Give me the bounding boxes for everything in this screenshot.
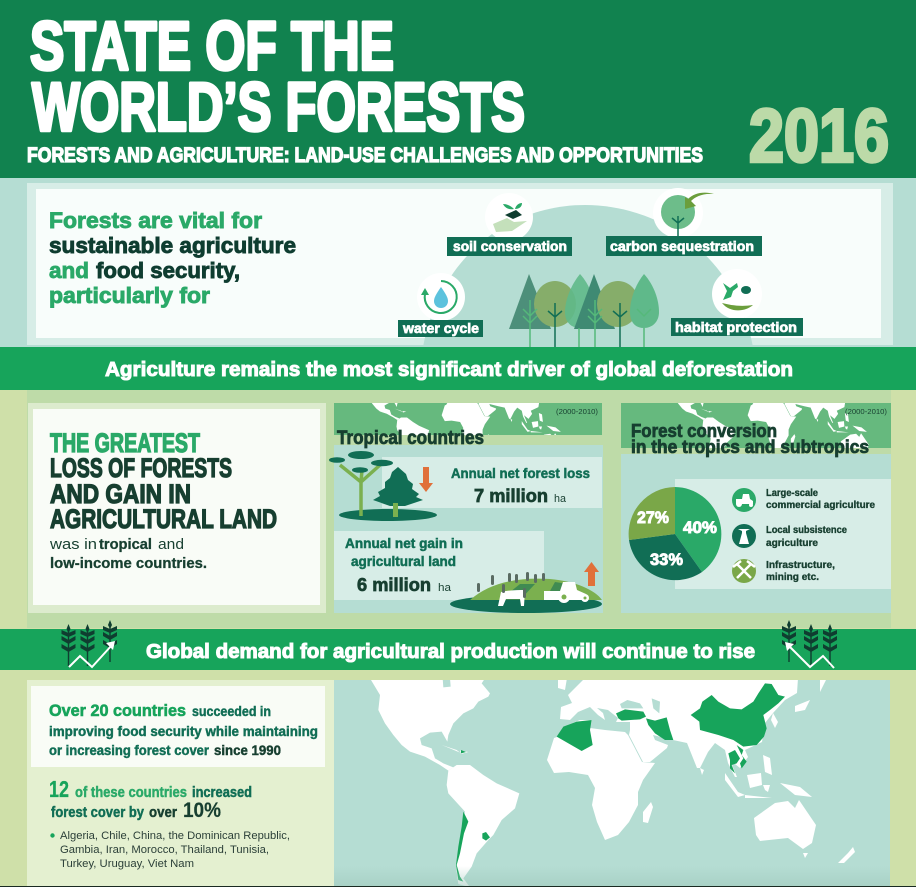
panel: forests are vital [0, 178, 916, 348]
middle section background [27, 390, 891, 628]
world map strip [621, 403, 891, 448]
title: WORLD’S FORESTS [32, 68, 525, 146]
pie chart: 40% [683, 518, 717, 537]
intro text: sustainable agriculture [49, 233, 296, 258]
panel: tropical countries [329, 403, 603, 613]
panel: the greatest loss: AND GAIN IN [50, 479, 191, 509]
highlighted countries: Eurasia and Africa [557, 683, 785, 773]
intro text: food security, [96, 258, 240, 283]
panel: the greatest loss: tropical [99, 537, 152, 553]
icon: water cycle [417, 273, 465, 321]
list of countries [50, 830, 290, 870]
year: 2016 [749, 94, 889, 178]
panel: the greatest loss: low-income countries. [50, 556, 207, 572]
legend: local subsistence agriculture: Local subsistence [766, 525, 847, 536]
stat: forest loss [451, 465, 590, 506]
banner: deforestation: Agriculture remains the most significant driver of global deforestation [105, 359, 793, 381]
panel: tropical countries: (2000-2010) [556, 409, 598, 416]
stat: agricultural gain [345, 535, 463, 595]
pie chart: 27% [637, 508, 669, 527]
panel: the greatest loss [28, 403, 326, 613]
title: STATE OF THE [30, 8, 394, 84]
text: over 20 countries: since 1990 [214, 742, 281, 758]
stat: agricultural gain: 6 million [357, 575, 431, 595]
intro text: particularly for [49, 283, 210, 308]
legend: large-scale agriculture: commercial agriculture [766, 500, 875, 511]
stat: agricultural gain: agricultural land [351, 553, 456, 569]
list of countries: Algeria, Chile, China, the Dominican Republic, [60, 830, 290, 842]
panel: the greatest loss: THE GREATEST [50, 428, 200, 458]
list of countries: Gambia, Iran, Morocco, Thailand, Tunisia, [60, 844, 269, 856]
label: habitat protection: habitat protection [675, 319, 797, 335]
text: 12 countries: over [149, 805, 177, 821]
icon: trees [329, 451, 437, 521]
subtitle: FORESTS AND AGRICULTURE: LAND-USE CHALLENGES AND OPPORTUNITIES [27, 144, 703, 167]
text: over 20 countries: Over 20 countries [49, 701, 186, 720]
arrow: forest loss [419, 467, 433, 492]
pie chart: 33% [650, 550, 683, 569]
arrow: land gain [584, 562, 599, 586]
title [30, 8, 525, 146]
icon: soil conservation [485, 193, 533, 241]
panel: forest conversion [621, 403, 891, 613]
legend: infrastructure and mining: mining etc. [766, 572, 819, 583]
panel: the greatest loss: and [158, 537, 184, 553]
banner: deforestation [0, 347, 916, 390]
heading: Forest conversion [631, 421, 777, 441]
legend: large-scale agriculture: Large-scale [766, 488, 818, 499]
intro text: and [49, 258, 89, 283]
intro text [49, 208, 296, 308]
label: soil conservation: soil conservation [453, 238, 567, 254]
icon: habitat protection [712, 269, 762, 319]
legend: infrastructure and mining: Infrastructure, [766, 560, 835, 571]
stat: agricultural gain: Annual net gain in [345, 535, 463, 551]
heading: Tropical countries [337, 428, 484, 449]
label: carbon sequestration: carbon sequestration [610, 238, 754, 254]
legend: local subsistence agriculture: agriculture [766, 538, 818, 549]
stat: forest loss: Annual net forest loss [451, 465, 590, 481]
text: over 20 countries: succeeded in [192, 703, 271, 719]
legend: infrastructure and mining [732, 559, 835, 583]
panel: forest conversion: (2000-2010) [845, 409, 887, 416]
heading [631, 421, 869, 457]
text: 12 countries: of these countries [75, 785, 187, 801]
text: over 20 countries [49, 701, 318, 758]
legend: large-scale agriculture [732, 488, 875, 512]
text: 12 countries: 10% [183, 799, 221, 822]
forest dome illustration [423, 205, 753, 347]
highlighted countries: Americas [456, 750, 490, 882]
heading: in the tropics and subtropics [631, 437, 869, 457]
list of countries: Turkey, Uruguay, Viet Nam [60, 858, 194, 870]
icon: farmland [450, 572, 602, 613]
stat: forest loss: 7 million [474, 486, 548, 506]
text: 12 countries: 12 [49, 776, 69, 802]
icon: carbon sequestration [653, 188, 714, 238]
pie chart [629, 487, 721, 580]
legend: local subsistence agriculture [732, 524, 847, 549]
text: 12 countries: increased [192, 785, 252, 801]
header [0, 0, 916, 178]
banner: rising demand: Global demand for agricultural production will continue to rise [146, 641, 755, 663]
inland seas [620, 698, 660, 713]
text: over 20 countries: improving food security while maintaining [49, 723, 318, 739]
text: over 20 countries: or increasing forest cover [49, 742, 210, 758]
text: 12 countries [49, 776, 252, 822]
stat: forest loss: ha [554, 493, 567, 505]
panel: success stories [27, 680, 334, 886]
banner: rising demand [0, 620, 916, 670]
world map strip [334, 403, 602, 435]
icon: wheat and rising arrow right [782, 620, 837, 668]
stat: agricultural gain: ha [438, 582, 452, 594]
icon: wheat and rising arrow left [62, 620, 117, 667]
world map [334, 678, 890, 887]
panel: the greatest loss: AGRICULTURAL LAND [50, 504, 277, 534]
panel: the greatest loss: was in [49, 537, 97, 553]
intro text: Forests are vital for [49, 208, 262, 233]
panel: the greatest loss: LOSS OF FORESTS [50, 453, 232, 483]
label: water cycle: water cycle [402, 320, 479, 336]
text: 12 countries: forest cover by [51, 805, 144, 821]
